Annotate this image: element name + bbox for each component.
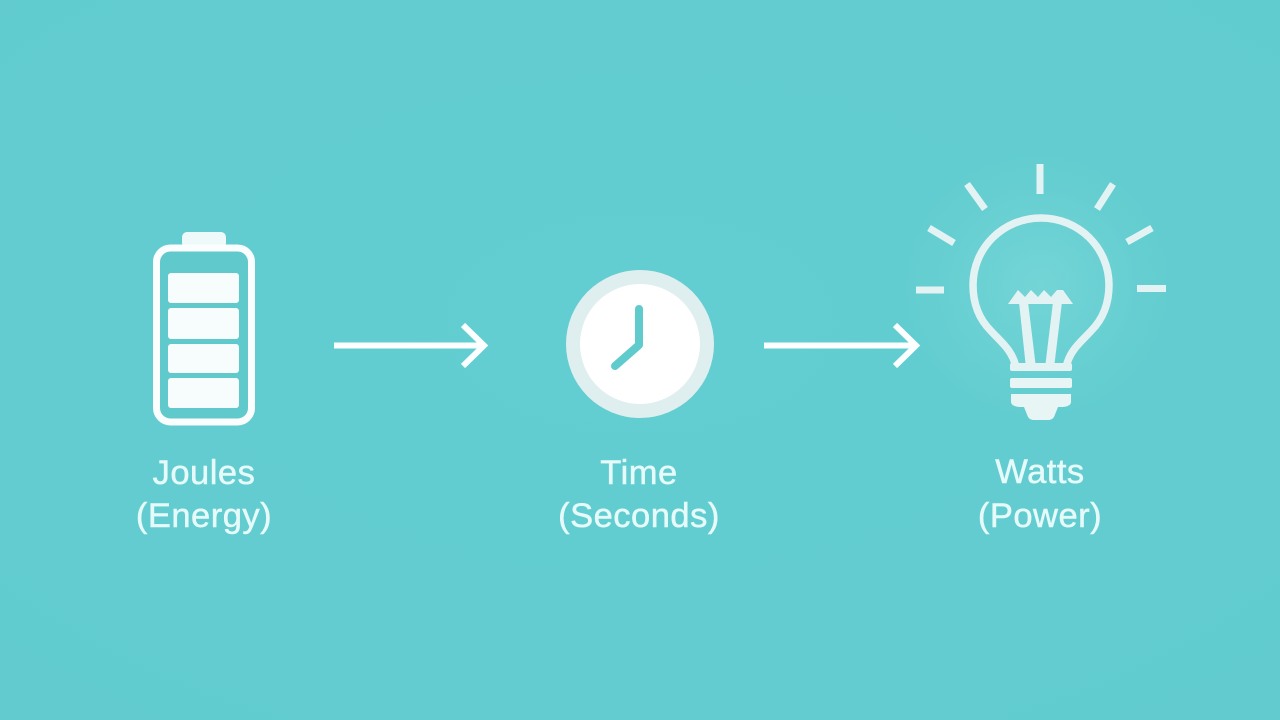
arrow: time to power	[764, 325, 916, 366]
label: Time (Seconds): (Seconds)	[558, 497, 720, 535]
label: Time (Seconds): Time	[600, 454, 678, 492]
icon: battery	[156, 232, 252, 422]
arrow: energy to time	[334, 325, 484, 366]
bulb base	[1010, 378, 1072, 420]
bulb filament	[1008, 290, 1073, 371]
label: Watts (Power): Watts	[995, 453, 1085, 491]
label: Watts (Power)	[978, 453, 1102, 535]
bulb glass	[973, 218, 1109, 367]
bulb rays	[916, 164, 1166, 290]
glow behind bulb	[905, 150, 1175, 420]
label: Joules (Energy): (Energy)	[136, 497, 272, 535]
icon: clock	[566, 270, 714, 418]
label: Watts (Power): (Power)	[978, 497, 1102, 535]
icon: light bulb	[916, 164, 1166, 420]
label: Joules (Energy)	[136, 454, 272, 535]
label: Time (Seconds)	[558, 454, 720, 535]
label: Joules (Energy): Joules	[153, 454, 255, 492]
